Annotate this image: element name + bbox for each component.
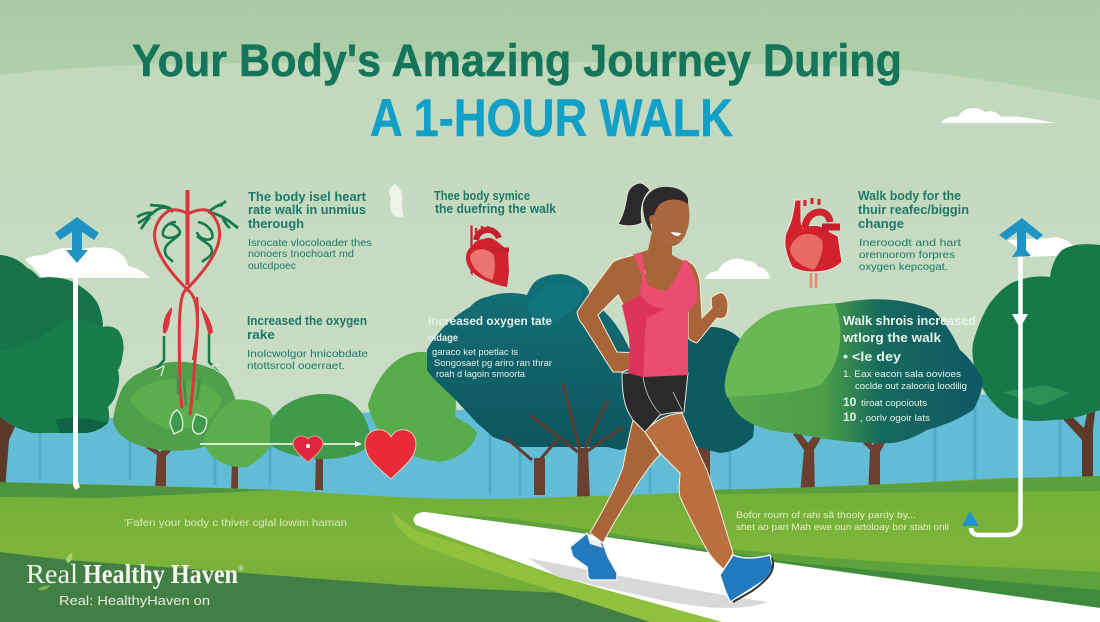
left vertical arrow bbox=[55, 217, 99, 490]
ground: green lawn bbox=[0, 476, 1100, 622]
caption: lower left: 'Fafen your body c thiver cglal lowim haman bbox=[124, 517, 347, 529]
anatomy figure: circulation bbox=[137, 190, 238, 434]
tree: far left dark green bbox=[0, 255, 124, 490]
text block: right top: change bbox=[858, 217, 904, 231]
icon: centre heart bbox=[466, 225, 509, 287]
text block: right tree list: 10 bbox=[843, 410, 857, 424]
brand logo: Real: HealthyHaven on bbox=[59, 593, 210, 608]
text block: right tree list: tiroat copoiouts bbox=[861, 398, 927, 409]
ponytail bbox=[618, 183, 650, 226]
caption: lower right: Bofor rourn of rahi sã thooly pardy by... bbox=[736, 510, 916, 521]
tree: dark teal behind walker bbox=[650, 327, 754, 490]
text block: right top: oxygen kepcogat. bbox=[859, 261, 948, 273]
large heart bbox=[365, 430, 416, 479]
near arm bbox=[577, 255, 645, 372]
text block: centre oxygen: roah d lagoin smoorta bbox=[436, 369, 526, 380]
caption: lower right bbox=[736, 510, 949, 533]
text block: right tree list: 10 bbox=[843, 395, 857, 409]
text block: right tree list: Walk shrois increased bbox=[843, 314, 976, 328]
text block: centre oxygen: Songosaet pg ariro ran thrar bbox=[434, 358, 552, 369]
tank top bbox=[622, 253, 697, 377]
text block: heart rate: outcdpoec bbox=[248, 260, 296, 272]
text block: oxygen rake bbox=[247, 314, 368, 372]
text block: heart rate: rate walk in unmius bbox=[248, 203, 366, 217]
text block: centre top: Thee body symice bbox=[434, 189, 530, 203]
walker figure bbox=[577, 183, 733, 570]
text block: oxygen rake: ntottsrcol ooerraet. bbox=[247, 360, 345, 372]
text block: right top: orennorom forpres bbox=[859, 249, 955, 261]
far arm bbox=[688, 261, 728, 343]
tree: far right dark green bbox=[972, 244, 1100, 490]
text block: centre top bbox=[434, 189, 556, 216]
text block: oxygen rake: Inolcwolgor hnicobdate bbox=[247, 348, 368, 360]
text block: right top bbox=[858, 189, 969, 273]
shorts bbox=[622, 373, 688, 432]
icon: right heart bbox=[785, 198, 842, 288]
text block: right top: Walk body for the bbox=[858, 189, 961, 203]
rear shoe bbox=[720, 555, 773, 602]
back leg bbox=[590, 420, 660, 543]
near leg bbox=[645, 413, 733, 570]
icon: small white glyph bbox=[389, 184, 403, 217]
right vertical arrow bbox=[962, 218, 1043, 535]
trees: right green and teal pair bbox=[725, 299, 983, 495]
text block: right tree list: • <le dey bbox=[843, 350, 901, 364]
smile bbox=[671, 232, 681, 236]
head bbox=[652, 195, 689, 246]
text block: right top: Inerooodt and hart bbox=[859, 237, 961, 249]
brand logo: ® bbox=[238, 564, 244, 573]
text block: heart rate: nonoers Inochoart md bbox=[248, 248, 354, 260]
text block: oxygen rake: rake bbox=[247, 328, 275, 342]
clouds bbox=[25, 108, 1074, 279]
text block: right tree list: wtlorg the walk bbox=[842, 331, 941, 345]
text block: right tree list: 1. Eax eacon sala oovioes bbox=[843, 369, 961, 380]
brand logo bbox=[26, 553, 244, 608]
trees: light green row bbox=[113, 352, 477, 490]
caption: lower right: shet ao part Mah ewe oun artoloay bor stabi onil bbox=[736, 522, 949, 533]
text block: heart rate bbox=[248, 190, 372, 272]
walking path bbox=[392, 512, 1100, 622]
text block: heart rate: The body isel heart bbox=[248, 190, 367, 204]
text block: right top: thuir reafec/biggin bbox=[858, 203, 969, 217]
brand logo: Healthy Haven bbox=[83, 559, 238, 589]
brand logo: Real bbox=[26, 559, 78, 589]
title: Your Body's Amazing Journey During bbox=[132, 35, 902, 86]
text block: heart rate: therough bbox=[248, 217, 304, 231]
title: A 1-HOUR WALK bbox=[370, 89, 733, 148]
text block: right tree list: , oorlv ogoir lats bbox=[860, 413, 930, 424]
text block: heart rate: Isrocate vlocoloader thes bbox=[248, 237, 372, 249]
text block: centre top: the duefring the walk bbox=[435, 202, 556, 216]
heart timeline arrow bbox=[200, 436, 362, 462]
text block: right tree list: coclde out zaloorig loodilig bbox=[855, 381, 967, 392]
text block: centre oxygen: Increased oxygen tate bbox=[428, 314, 552, 328]
title bbox=[132, 35, 902, 148]
text block: centre oxygen bbox=[428, 314, 552, 380]
hair bbox=[643, 187, 688, 232]
neck and chest bbox=[632, 232, 685, 292]
text block: right tree list bbox=[842, 314, 976, 424]
text block: oxygen rake: Increased the oxygen bbox=[247, 314, 367, 328]
tree: dark teal centre bbox=[427, 274, 645, 500]
front shoe bbox=[570, 533, 617, 580]
small heart bbox=[293, 436, 323, 462]
text block: centre oxygen: garaco ket poetlac is bbox=[432, 347, 518, 358]
text block: centre oxygen: oldage bbox=[428, 333, 458, 344]
